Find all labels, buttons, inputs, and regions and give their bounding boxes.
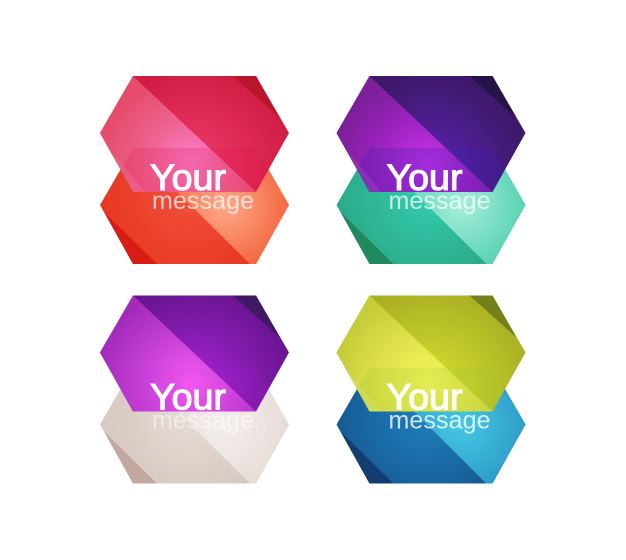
text: your message xyxy=(386,376,490,434)
text: your message: message xyxy=(388,187,490,215)
panel: lime and blue hexagons xyxy=(336,296,526,484)
text: your message: message xyxy=(152,187,254,215)
upper hexagon: crimson xyxy=(100,76,289,192)
text: your message: Your xyxy=(150,157,226,198)
text: your message: Your xyxy=(386,376,462,418)
lower hexagon: green xyxy=(336,148,526,264)
lower hexagon: orange red xyxy=(100,148,289,264)
text: your message xyxy=(150,157,254,215)
panel: purple and beige hexagons xyxy=(100,296,289,484)
upper hexagon: lime xyxy=(336,296,526,412)
text: your message: Your xyxy=(150,376,226,418)
text: your message xyxy=(386,157,490,215)
lower hexagon: beige xyxy=(100,368,289,484)
upper hexagon: violet xyxy=(336,76,526,192)
text: your message: Your xyxy=(386,157,462,198)
panel: purple and green hexagons xyxy=(336,76,526,264)
text: your message xyxy=(150,376,254,434)
upper hexagon: purple xyxy=(100,296,289,412)
text: your message: message xyxy=(388,406,490,434)
text: your message: message xyxy=(152,406,254,434)
panel: red hexagons xyxy=(100,76,289,264)
lower hexagon: blue xyxy=(336,368,526,484)
